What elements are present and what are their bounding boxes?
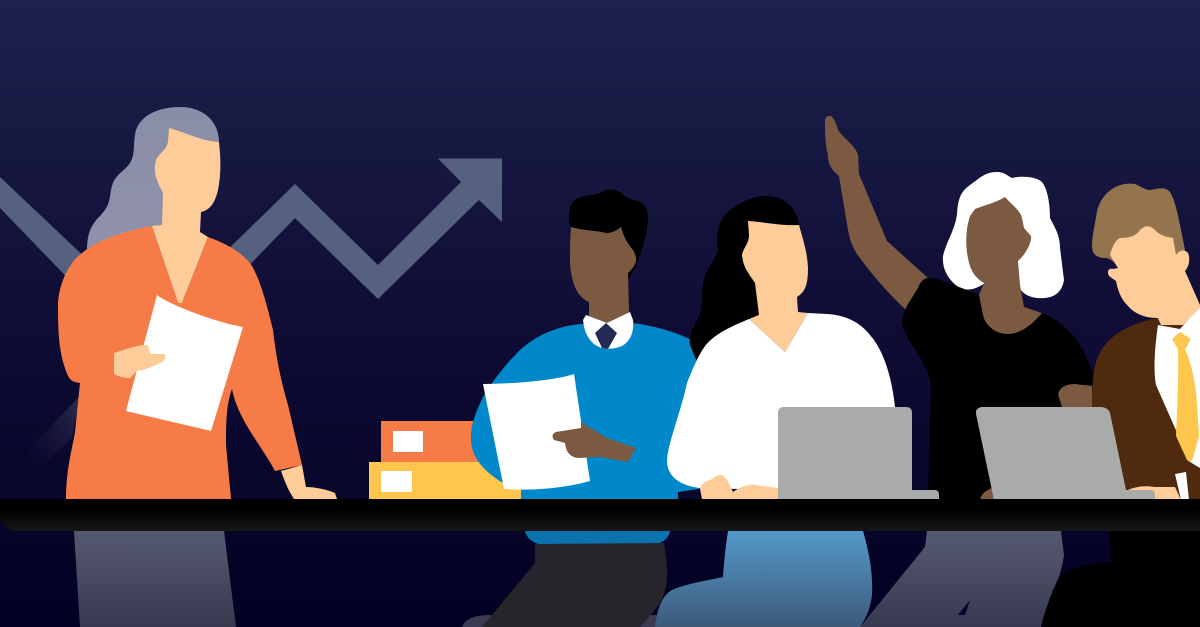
man hair — [569, 189, 648, 280]
raiser trousers — [860, 531, 1064, 627]
presenter resting hand — [281, 465, 337, 499]
laptop two — [976, 407, 1155, 500]
person: woman in white — [655, 196, 895, 627]
suit tie — [1172, 332, 1199, 462]
presenter hair — [87, 107, 219, 262]
orange binder — [381, 421, 481, 462]
raiser forearm — [1058, 384, 1092, 407]
raised arm — [825, 116, 928, 310]
presenter paper — [126, 295, 243, 431]
person: presenter in orange — [58, 107, 337, 627]
man chair — [462, 615, 660, 627]
man paper — [483, 374, 590, 490]
binders — [369, 421, 524, 499]
raiser skin — [966, 197, 1042, 334]
suit man trousers — [1041, 531, 1200, 627]
raiser hand — [980, 488, 995, 500]
person: man in brown jacket — [976, 184, 1200, 627]
woman jeans — [655, 531, 872, 627]
woman hair — [690, 196, 799, 362]
woman hand — [700, 475, 778, 499]
trend arrow — [0, 158, 502, 480]
man collar — [583, 312, 633, 349]
woman blouse — [667, 313, 895, 495]
person: woman raising hand — [825, 116, 1130, 627]
man sweater — [471, 323, 720, 499]
man trousers — [482, 543, 667, 627]
suit hand — [1128, 486, 1181, 500]
suit jacket — [1092, 318, 1200, 500]
presenter dress — [58, 226, 302, 499]
suit shirt — [1155, 306, 1200, 468]
presenter holding hand — [114, 345, 165, 378]
laptop one — [778, 407, 939, 499]
yellow binder — [369, 462, 524, 499]
suit paper strip — [1175, 472, 1189, 500]
conference table — [0, 499, 1200, 531]
presenter legs — [74, 531, 236, 627]
raiser hair — [943, 172, 1064, 298]
man lower sweater — [525, 531, 670, 548]
man head — [570, 227, 636, 330]
man pointing hand — [553, 422, 636, 462]
man tie — [595, 323, 617, 349]
suit face — [1108, 226, 1200, 325]
suit hair — [1092, 184, 1185, 268]
raiser black top — [902, 278, 1130, 500]
person: man in blue sweater — [462, 189, 720, 627]
presenter skin — [152, 128, 220, 303]
woman skin — [742, 221, 808, 352]
